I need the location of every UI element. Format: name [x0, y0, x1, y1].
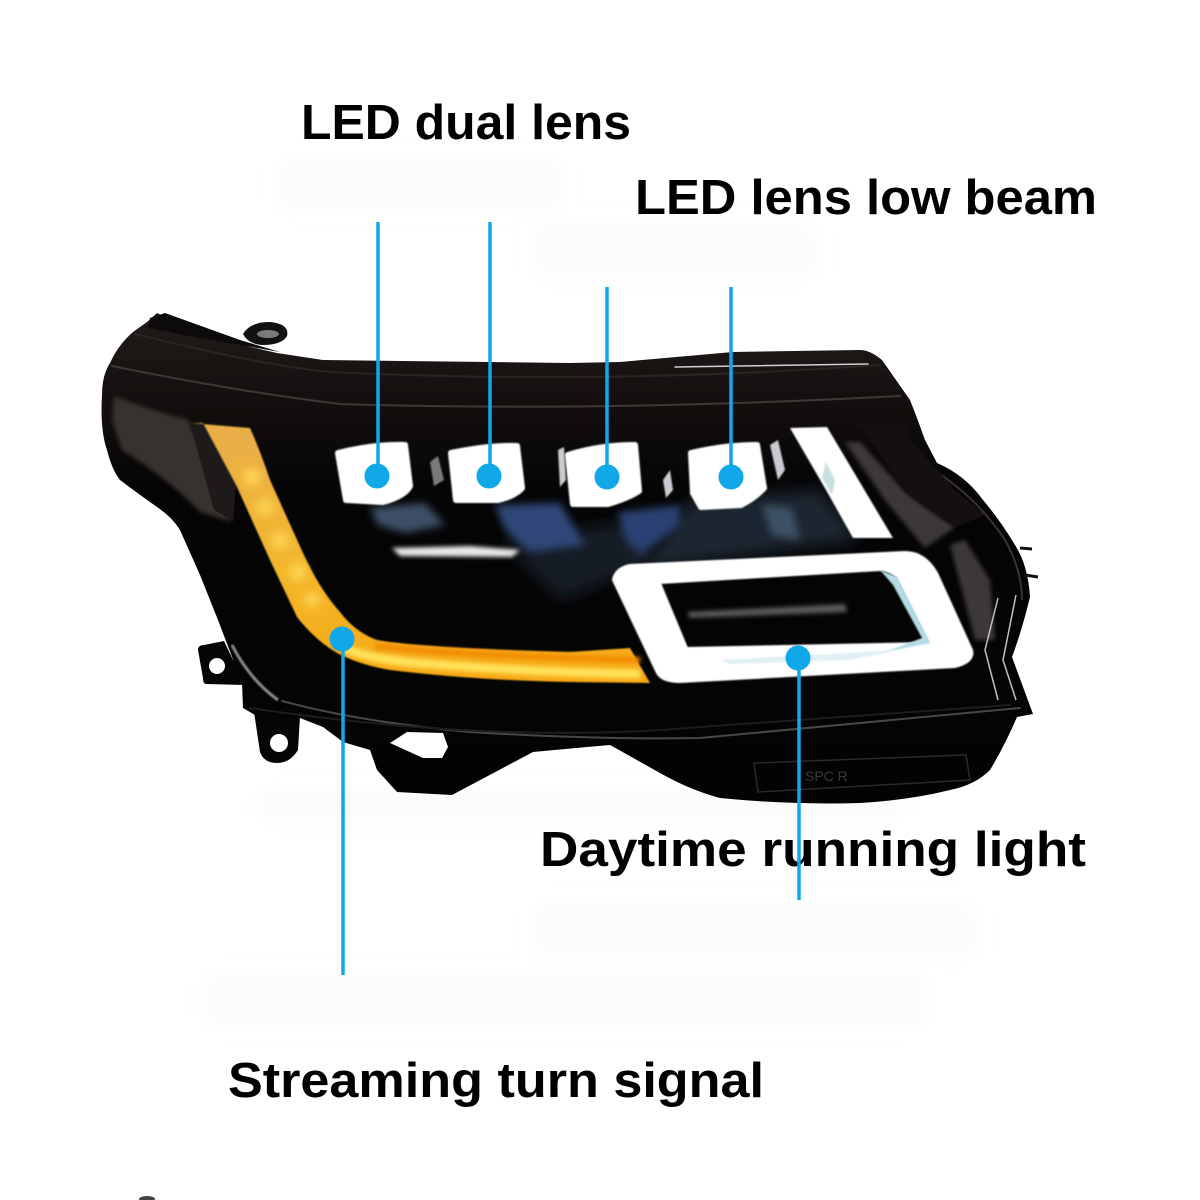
label: Streaming turn signal: Streaming turn signal	[228, 1054, 764, 1108]
model plate	[754, 755, 970, 792]
callout: dual lens 2	[477, 222, 501, 488]
label: Daytime running light: Daytime running light	[540, 823, 1086, 877]
right edge lines	[985, 595, 1016, 700]
daytime running light ring	[613, 552, 972, 682]
lower cut-out	[390, 732, 448, 758]
lower left lens edge	[232, 645, 278, 700]
callout: streaming turn signal	[330, 627, 354, 975]
reflector highlight	[392, 546, 520, 557]
callout: low beam 1	[595, 287, 619, 489]
model plate: SPC R	[805, 768, 848, 784]
amber turn signal	[190, 423, 650, 683]
side tabs	[1020, 548, 1038, 577]
lens: 2	[451, 446, 522, 500]
blue sparkle areas	[370, 503, 800, 555]
amber highlights	[243, 468, 320, 608]
daytime light inner tint	[880, 570, 930, 652]
callout: daytime running light	[786, 646, 810, 900]
amber band core	[345, 648, 640, 674]
reflector streaks	[430, 440, 785, 498]
upper daytime light bar	[790, 427, 893, 538]
mounting bracket: left	[198, 641, 245, 685]
lens: 1	[338, 445, 410, 502]
top trim highlights	[112, 334, 1020, 738]
glass haze	[500, 490, 860, 600]
label: LED dual lens: LED dual lens	[301, 96, 631, 150]
small mark at bottom edge	[139, 1196, 155, 1200]
right dome detail	[930, 468, 1022, 600]
top gasket	[148, 313, 280, 352]
ghost reflections of faded text	[205, 160, 975, 1025]
callout: low beam 2	[719, 287, 743, 489]
projector bar	[687, 604, 847, 618]
top clip	[243, 322, 287, 345]
headlight	[102, 313, 1038, 803]
lens: 4	[691, 445, 764, 507]
label: LED lens low beam: LED lens low beam	[635, 171, 1097, 225]
mounting bracket: lower	[254, 712, 300, 763]
grey side marker: right	[845, 442, 955, 548]
lens: 3	[568, 445, 639, 504]
amber band streak	[375, 646, 640, 660]
callout: dual lens 1	[365, 222, 389, 488]
grey side marker: left	[112, 396, 232, 522]
headlight housing	[102, 313, 1033, 803]
